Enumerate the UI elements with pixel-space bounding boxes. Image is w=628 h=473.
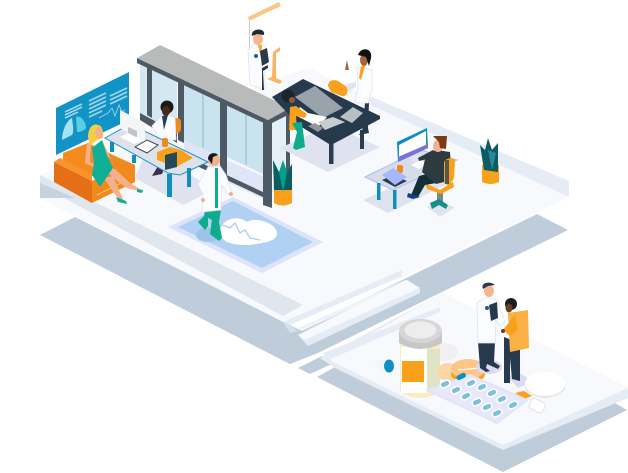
patient in orange jacket	[501, 298, 533, 388]
lower platform shadow	[317, 367, 627, 472]
desk left	[105, 110, 208, 197]
standing doctor with clipboard	[248, 2, 282, 90]
armchair	[54, 143, 135, 203]
icon: heart	[220, 218, 277, 245]
main floor	[40, 67, 569, 333]
rug with heart	[168, 197, 323, 273]
white bowl	[515, 372, 565, 414]
office desk	[365, 128, 457, 209]
office worker on chair	[407, 136, 455, 217]
lower platform	[320, 293, 628, 450]
shelving unit	[137, 45, 290, 208]
left capsule	[373, 359, 395, 373]
desk shadow	[135, 146, 213, 205]
shadow fragment	[298, 356, 334, 374]
pill bottle	[399, 319, 442, 398]
paperwork	[135, 140, 158, 153]
connecting steps	[298, 280, 420, 346]
seated doctor at table	[282, 90, 307, 150]
monitor	[120, 110, 145, 143]
blister pack	[427, 372, 527, 423]
books	[382, 175, 407, 187]
office desk shadow	[363, 170, 455, 213]
doctor in lower scene	[476, 283, 505, 374]
white dish behind bottle	[428, 343, 458, 361]
books	[157, 147, 193, 167]
plant right	[480, 138, 499, 184]
standing female doctor	[328, 49, 372, 135]
table shadow	[280, 125, 380, 172]
plant left	[273, 160, 292, 206]
mug	[162, 138, 168, 147]
drafting table	[272, 79, 380, 164]
monitor	[397, 128, 428, 162]
wall panel: lungs board	[56, 72, 129, 155]
orange tablets	[437, 359, 485, 383]
shelf top	[137, 45, 290, 120]
walking doctor	[198, 153, 233, 241]
main floor shadow	[40, 214, 568, 364]
seated receptionist	[152, 100, 181, 176]
seated woman	[85, 125, 143, 204]
